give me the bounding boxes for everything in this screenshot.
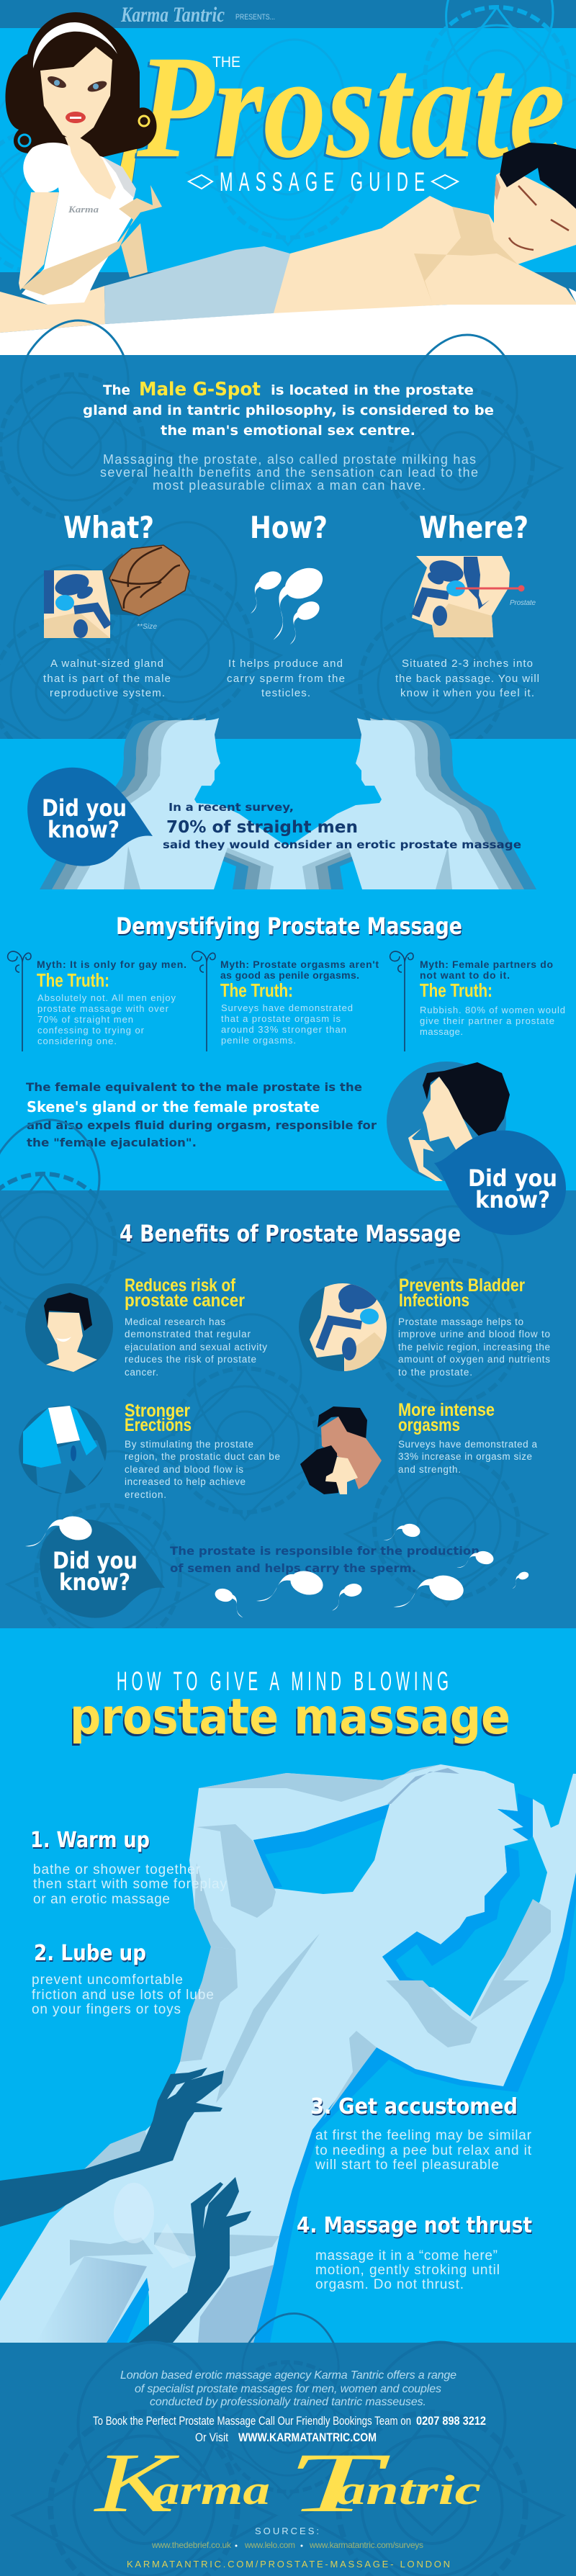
step 2: friction and use lots of lube [32,1988,214,2003]
benefit 4: Surveys have demonstrated a [398,1439,537,1450]
benefit 3: cleared and blood flow is [125,1464,243,1475]
text: prostate responsibility: The prostate is responsible for the production [170,1544,480,1558]
benefit 2: Prostate massage helps to [398,1316,523,1327]
myth 2: that a prostate orgasm is [221,1013,341,1024]
panel: benefits [0,1120,576,1656]
benefit 2: amount of oxygen and nutrients [398,1354,550,1365]
logo: Karma Tantric: Tantric [173,3,225,27]
heading text [83,379,494,439]
logo: Karma Tantric: arma [153,2467,270,2513]
female prostate text: the "female ejaculation". [27,1136,197,1149]
icon: anatomy diagram: Prostate [510,599,536,607]
step 4 [297,2213,532,2292]
icons: sperm [210,1522,531,1617]
step 2: 2. Lube up [34,1941,146,1966]
heading: benefits: 4 Benefits of Prostate Massage [120,1220,461,1247]
step 1: or an erotic massage [33,1892,170,1907]
benefit 2: the pelvic region, increasing the [398,1342,550,1352]
column: where: Where? [419,510,528,545]
booking text: Or Visit [195,2431,228,2444]
myth 3: not want to do it. [420,969,510,981]
myth 2: penile orgasms. [221,1035,296,1046]
myth 1: prostate massage with over [37,1003,169,1014]
myth 3: massage. [420,1026,463,1037]
myth 3: give their partner a prostate [420,1015,554,1026]
benefit 2: Infections [399,1291,469,1311]
column: how [227,510,345,699]
column: how: How? [250,510,328,545]
female prostate text: Skene's gland or the female prostate [27,1098,320,1116]
panel: how to [0,1628,576,2343]
icon: couple [300,1406,382,1494]
subtitle: massage guide: MASSAGE GUIDE [220,167,425,197]
heading: demystifying: Demystifying Prostate Massage [116,912,462,940]
callout: did you know 1: Did you [42,794,127,822]
intro text: Massaging the prostate, also called prostate milking has [103,452,476,467]
survey text: 70% of straight men [166,818,358,837]
benefit 3: region, the prostatic duct can be [125,1451,280,1462]
panel: myths [0,718,576,1190]
survey text [163,801,521,851]
top bar [0,0,576,28]
agency text: of specialist prostate massages for men, women and couples [135,2383,441,2395]
step 1: bathe or shower together [33,1862,201,1877]
heading text: gland and in tantric philosophy, is considered to be [83,403,494,418]
myth 2: around 33% stronger than [221,1024,346,1035]
step 4: motion, gently stroking until [315,2263,500,2278]
agency text [120,2369,456,2408]
benefit 4: and strength. [398,1464,461,1475]
benefit 2: Prevents Bladder [399,1275,525,1296]
myth 3: Rubbish. 80% of women would [420,1005,565,1015]
column: what: What? [63,510,154,545]
sources: www.lelo.com [244,2540,295,2550]
heading text: is located in the prostate [271,382,474,398]
column: what [43,510,189,699]
column: where [395,510,539,699]
myth 2: Myth: Prostate orgasms aren't [220,959,379,970]
myth 2: as good as penile orgasms. [220,969,359,981]
sources: www.thedebrief.co.uk [151,2540,232,2550]
icon: sperm [235,555,336,645]
benefit 4: orgasms [398,1415,460,1435]
booking text [93,2414,486,2444]
heading: prostate massage: prostate massage [70,1689,510,1746]
benefit 1 [25,1275,267,1378]
intro text [100,452,478,493]
step 1: 1. Warm up [30,1828,150,1853]
benefit 4: More intense [398,1400,495,1420]
myth 1: 70% of straight men [37,1014,133,1025]
myth 1: considering one. [37,1036,117,1046]
benefit 2: improve urine and blood flow to [398,1329,550,1339]
step 1: then start with some foreplay [33,1877,228,1892]
icon: walnut and diagram: **Size [137,623,157,631]
step 2: on your fingers or toys [32,2002,181,2017]
top bar: PRESENTS... [235,13,275,22]
column: where: the back passage. You will [395,673,539,685]
column: what: reproductive system. [50,687,165,699]
myth 3: The Truth: [420,979,492,1001]
step 2 [32,1941,214,2017]
column: where: know it when you feel it. [400,687,534,699]
icon: walnut and diagram [44,545,189,638]
benefit 1: Reduces risk of [125,1275,236,1296]
step 3: will start to feel pleasurable [315,2158,499,2173]
column: what: that is part of the male [43,673,171,685]
logo: Karma Tantric: T [287,2436,391,2530]
illustration: hands [0,2068,251,2343]
benefit 1: prostate cancer [125,1291,245,1311]
panel: footer [0,2313,576,2576]
column: where: Situated 2-3 inches into [402,658,533,670]
step 3 [310,2094,532,2173]
column: how: carry sperm from the [227,673,345,685]
survey text: said they would consider an erotic prostate massage [163,838,521,851]
illustration: woman [5,12,162,305]
benefit 3: Stronger [125,1401,190,1421]
female prostate text [26,1080,377,1149]
heading text: Male G-Spot [139,379,261,400]
benefit 1: ejaculation and sexual activity [125,1342,267,1352]
sources: KARMATANTRIC.COM/PROSTATE-MASSAGE- LONDON [127,2559,450,2570]
column: what: A walnut-sized gland [50,658,163,670]
panel: hero [0,0,576,359]
benefit 1: demonstrated that regular [125,1329,251,1339]
panel: intro [0,320,576,771]
benefit 3: Erections [125,1415,192,1435]
female prostate text: and also expels fluid during orgasm, responsible for [27,1118,377,1132]
icon: man [25,1283,113,1372]
booking text: To Book the Perfect Prostate Massage Call Our Friendly Bookings Team on [93,2414,411,2428]
myth 3: Myth: Female partners do [420,959,553,970]
benefit 1: Medical research has [125,1316,225,1327]
agency text: London based erotic massage agency Karma Tantric offers a range [120,2369,456,2382]
column: how: It helps produce and [228,658,343,670]
myth 1: Absolutely not. All men enjoy [37,992,176,1003]
benefit 4 [300,1400,537,1494]
icon: anatomy diagram [412,556,536,637]
title: Prostate: THE [212,54,240,71]
myth 2: The Truth: [220,979,293,1001]
logo: Karma Tantric [120,3,225,27]
benefit 2: to the prostate. [398,1367,472,1378]
step 3: at first the feeling may be similar [315,2128,532,2143]
callout: did you know 2: Did you [468,1164,557,1192]
callout: did you know 2: know? [475,1186,550,1213]
myth 1: The Truth: [37,969,109,991]
benefit 1: cancer. [125,1367,158,1378]
massage table [0,305,576,355]
column: how: testicles. [261,687,310,699]
survey text: In a recent survey, [168,801,294,814]
sources [127,2526,450,2570]
callout: did you know 3: know? [59,1569,130,1596]
callout: did you know 3 [25,1513,165,1618]
intro text: several health benefits and the sensation can lead to the [100,465,478,480]
benefit 1: reduces the risk of prostate [125,1354,256,1365]
step 3: 3. Get accustomed [310,2094,518,2119]
callout: did you know 1: know? [48,816,120,843]
myth 3 [390,951,565,1051]
booking text: 0207 898 3212 [416,2414,486,2428]
illustration: thinking woman [387,1062,510,1181]
step 4: massage it in a “come here” [315,2248,498,2263]
female prostate text: The female equivalent to the male prostate is the [26,1080,362,1094]
myth 1: confessing to trying or [37,1025,145,1036]
myth 1: Myth: It is only for gay men. [37,959,186,970]
heading text: the man's emotional sex centre. [161,423,415,439]
sources: www.karmatantric.com/surveys [309,2540,423,2550]
myth 2: Surveys have demonstrated [221,1002,353,1013]
myth 1 [8,951,186,1051]
benefit 3 [19,1401,280,1500]
icon: anatomy [299,1282,389,1375]
illustration: woman: Karma [68,204,99,215]
myth 2 [192,951,379,1051]
callout: did you know 1 [27,768,153,866]
icon: towel figure [19,1406,107,1494]
illustration: man on table [0,143,576,333]
step 3: to needing a pee but relax and it [315,2143,532,2158]
step 4: 4. Massage not thrust [297,2213,532,2238]
logo: Karma Tantric: antric [336,2467,481,2513]
benefit 4: 33% increase in orgasm size [398,1451,532,1462]
benefit 2 [299,1275,550,1378]
illustration: body silhouette [0,1764,576,2343]
intro text: most pleasurable climax a man can have. [153,478,426,493]
text: prostate responsibility: of semen and helps carry the sperm. [170,1561,416,1575]
step 4: orgasm. Do not thrust. [315,2277,464,2292]
step 2: prevent uncomfortable [32,1973,183,1988]
logo: Karma Tantric: Karma [120,3,168,27]
step 1 [30,1828,228,1907]
sources: SOURCES: [255,2526,319,2536]
benefit 3: increased to help achieve [125,1476,246,1487]
callout: did you know 2 [434,1131,566,1235]
agency text: conducted by professionally trained tantric masseuses. [150,2396,426,2408]
callout: did you know 3: Did you [53,1547,138,1574]
benefit 3: By stimulating the prostate [125,1439,253,1450]
booking text: WWW.KARMATANTRIC.COM [238,2431,377,2444]
logo: Karma Tantric: K [93,2436,179,2530]
benefit 3: erection. [125,1489,166,1500]
heading: how to give: HOW TO GIVE A MIND BLOWING [117,1667,449,1697]
illustration: two silhouettes [40,718,536,889]
heading text: The [103,382,130,398]
text: prostate responsibility [170,1544,480,1575]
logo: Karma Tantric [93,2436,481,2530]
